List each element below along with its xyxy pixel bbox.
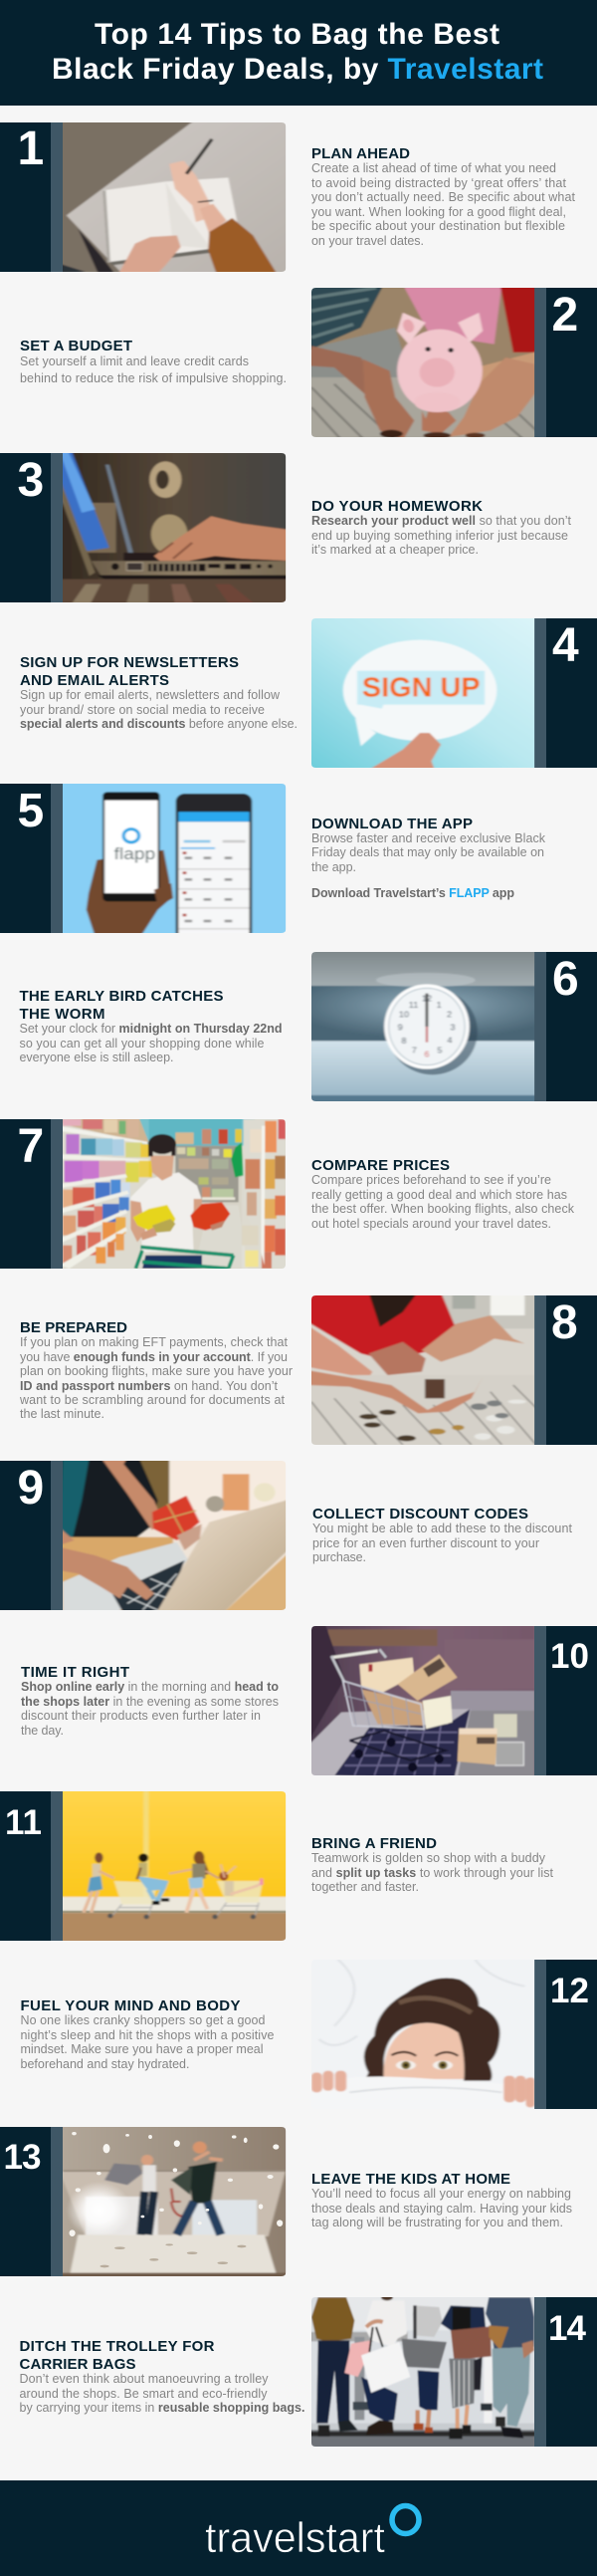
number band [0, 1791, 63, 1941]
body text: If you plan on making EFT payments, check that [20, 1335, 289, 1349]
photo: wall clock: 11 [409, 1001, 419, 1010]
photo: gift and laptop [59, 1458, 292, 1613]
body text: night’s sleep and hit the shops with a positive [20, 2028, 275, 2042]
number band [534, 288, 597, 437]
body text [311, 831, 546, 900]
heading [20, 654, 239, 689]
body text: Set your clock for midnight on Thursday 22nd [20, 1022, 283, 1036]
body text: around the shops. Be smart and eco-friendly [20, 2387, 268, 2401]
body text: those deals and staying calm. Having your kids [311, 2202, 572, 2216]
heading: BE PREPARED [20, 1319, 127, 1336]
number band [534, 1295, 597, 1445]
body text: everyone else is still asleep. [20, 1051, 173, 1064]
number band: 7 [18, 1120, 44, 1173]
heading: BRING A FRIEND [311, 1835, 437, 1852]
body text [311, 1173, 575, 1231]
photo: wall clock: 5 [437, 1046, 443, 1054]
body text: No one likes cranky shoppers so get a good [20, 2013, 266, 2027]
body text: Create a list ahead of time of what you need [311, 161, 556, 175]
body text: Sign up for email alerts, newsletters and follow [20, 688, 281, 702]
body text: beforehand and stay hydrated. [20, 2057, 189, 2071]
photo: sign up speech bubble [307, 615, 540, 771]
body text: special alerts and discounts before anyone else. [20, 717, 298, 731]
photo: friends racing trolleys [59, 1788, 292, 1944]
photo: wall clock: 3 [450, 1023, 456, 1032]
panel: tip 12 fuel your mind and body [20, 1957, 597, 2112]
photo: piggy bank [307, 285, 540, 440]
panel: tip 14 ditch the trolley [20, 2294, 597, 2450]
body text [311, 1851, 554, 1894]
body text: so you can get all your shopping done while [20, 1037, 265, 1051]
body text: you don’t actually need. Be specific about what [311, 190, 576, 204]
body text [311, 514, 572, 557]
number band: 6 [552, 953, 579, 1006]
logo ring icon [392, 2505, 419, 2533]
panel: tip 1 plan ahead [0, 119, 576, 275]
body text: Friday deals that may only be available on [311, 845, 544, 859]
body text: tag along will be frustrating for you and them. [311, 2216, 563, 2229]
heading: COLLECT DISCOUNT CODES [312, 1506, 528, 1522]
number band [0, 122, 63, 272]
photo: woman peeking from under a duvet [307, 1957, 540, 2112]
body text: Don’t even think about manoeuvring a trolley [20, 2372, 269, 2386]
body text: end up buying something inferior just because [311, 529, 568, 543]
number band: 8 [551, 1296, 578, 1349]
body text: price for an even further discount to your [312, 1536, 539, 1550]
footer banner [0, 2480, 597, 2576]
number band [534, 1960, 597, 2109]
number band: 9 [18, 1462, 44, 1515]
body text: the day. [21, 1724, 64, 1738]
heading: DOWNLOAD THE APP [311, 816, 473, 832]
number band [534, 1626, 597, 1775]
number band: 5 [18, 785, 44, 837]
body text: your brand/ store on social media to receive [20, 703, 265, 717]
body text: it’s marked at a cheaper price. [311, 543, 479, 557]
number band [0, 1119, 63, 1269]
panel: tip 7 compare prices [0, 1116, 575, 1272]
photo: writing in notebook [59, 119, 292, 275]
title: Black Friday Deals, by Travelstart [52, 53, 543, 86]
body text: together and faster. [311, 1880, 419, 1894]
number band: 11 [5, 1803, 42, 1842]
body text [20, 2013, 275, 2071]
photo: wall clock: 1 [437, 1001, 442, 1010]
heading: FUEL YOUR MIND AND BODY [20, 1997, 241, 2014]
photo: sign up speech bubble: SIGN UP [362, 672, 481, 703]
body text: want to be scrambling around for documents at [19, 1393, 286, 1407]
number band [534, 952, 597, 1101]
photo: wall clock: 7 [412, 1046, 417, 1055]
photo: man comparing products in supermarket [60, 1116, 292, 1272]
body text: the app. [311, 860, 356, 874]
photo: mini shopping trolley on a laptop [308, 1623, 540, 1778]
photo: hands counting coins [307, 1292, 540, 1448]
heading: PLAN AHEAD [311, 145, 410, 162]
body text: on your travel dates. [311, 234, 424, 248]
number band [0, 1461, 63, 1610]
number band: 12 [550, 1972, 589, 2010]
body text [20, 1022, 283, 1064]
body text [21, 1680, 279, 1738]
body text [20, 354, 287, 385]
photo: wall clock: 9 [398, 1023, 403, 1033]
number band: 1 [18, 122, 44, 175]
body text: by carrying your items in reusable shopping bags. [20, 2401, 304, 2415]
heading: DO YOUR HOMEWORK [311, 498, 483, 515]
body text [311, 2187, 572, 2229]
heading: SET A BUDGET [20, 338, 132, 354]
body text: Download Travelstart’s FLAPP app [311, 886, 514, 900]
body text: Set yourself a limit and leave credit cards [20, 354, 249, 368]
heading: SIGN UP FOR NEWSLETTERS [20, 654, 239, 671]
heading: THE WORM [20, 1006, 105, 1023]
panel: tip 3 do your homework [0, 450, 572, 605]
panel: tip 6 early bird [20, 949, 597, 1104]
body text: really getting a good deal and which store has [311, 1188, 567, 1202]
body text: You might be able to add these to the discount [312, 1522, 573, 1535]
number band: 4 [552, 619, 579, 672]
number band [0, 453, 63, 602]
panel: tip 9 collect discount codes [0, 1458, 573, 1613]
panel: tip 5 download the app [0, 781, 546, 940]
photo: wall clock: 6 [424, 1050, 430, 1058]
number band: 14 [548, 2309, 587, 2348]
heading: COMPARE PRICES [311, 1157, 450, 1174]
title: Top 14 Tips to Bag the Best [95, 18, 499, 51]
body text [312, 1522, 573, 1564]
heading: TIME IT RIGHT [21, 1664, 129, 1681]
body text: Browse faster and receive exclusive Black [311, 831, 546, 845]
body text: Compare prices beforehand to see if you’re [311, 1173, 551, 1187]
body text: behind to reduce the risk of impulsive shopping. [20, 371, 287, 385]
body text: you have enough funds in your account. If you [20, 1350, 288, 1364]
photo: flapp app on phones [59, 781, 292, 940]
heading [20, 2338, 215, 2373]
photo: typing on a laptop [59, 450, 292, 605]
heading: DITCH THE TROLLEY FOR [20, 2338, 215, 2355]
number band: 13 [4, 2138, 42, 2177]
photo: wall clock: 2 [447, 1010, 452, 1020]
title banner [0, 0, 597, 106]
photo: kids pillow fighting [59, 2124, 292, 2279]
body text: to avoid being distracted by ‘great offers’ that [311, 176, 567, 190]
panel: tip 11 bring a friend [0, 1788, 554, 1944]
body text: plan on booking flights, make sure you have your [20, 1364, 293, 1378]
body text [20, 688, 298, 731]
heading: THE EARLY BIRD CATCHES [20, 988, 223, 1005]
panel: tip 13 leave the kids at home [0, 2124, 572, 2279]
body text: purchase. [312, 1550, 366, 1564]
body text: and split up tasks to work through your list [311, 1866, 554, 1880]
number band [534, 618, 597, 768]
body text: You’ll need to focus all your energy on nabbing [311, 2187, 571, 2201]
number band: 10 [550, 1637, 589, 1676]
body text: ID and passport numbers on hand. You don’t [20, 1379, 279, 1393]
body text: you want. When looking for a good flight deal, [311, 205, 566, 219]
body text: Teamwork is golden so shop with a buddy [311, 1851, 546, 1865]
title [52, 18, 543, 86]
photo: wall clock [307, 949, 540, 1104]
body text: Shop online early in the morning and head to [21, 1680, 279, 1694]
body text: the best offer. When booking flights, also check [311, 1202, 575, 1216]
photo: wall clock: 4 [447, 1036, 453, 1045]
body text [19, 1335, 293, 1421]
heading: LEAVE THE KIDS AT HOME [311, 2171, 510, 2188]
panel: tip 10 time it right [21, 1623, 597, 1778]
body text: out hotel specials around your travel dates. [311, 1217, 551, 1231]
body text: the shops later in the evening as some stores [21, 1695, 279, 1709]
number band: 2 [551, 289, 578, 342]
photo: wall clock: 10 [399, 1010, 409, 1019]
number band [0, 784, 63, 933]
body text [311, 161, 576, 248]
number band [534, 2297, 597, 2447]
number band: 3 [18, 454, 44, 507]
photo: wall clock: 12 [422, 994, 432, 1003]
body text: mindset. Make sure you have a proper meal [20, 2042, 263, 2056]
heading: CARRIER BAGS [20, 2356, 135, 2373]
body text [20, 2372, 304, 2415]
panel: tip 8 be prepared [19, 1292, 597, 1448]
body text: be specific about your destination but flexible [311, 219, 565, 233]
body text: discount their products even further later in [21, 1709, 261, 1723]
number band [0, 2127, 63, 2276]
photo: flapp app on phones: flapp [114, 844, 155, 863]
photo: wall clock: 8 [401, 1037, 407, 1046]
photo: people with shopping bags [308, 2294, 540, 2450]
panel: tip 2 set a budget [20, 285, 597, 440]
body text: Research your product well so that you don’t [311, 514, 572, 528]
panel: tip 4 sign up [20, 615, 597, 771]
heading [20, 988, 223, 1023]
body text: the last minute. [20, 1407, 104, 1421]
heading: AND EMAIL ALERTS [20, 672, 169, 689]
logo wordmark: travelstart [205, 2514, 385, 2562]
